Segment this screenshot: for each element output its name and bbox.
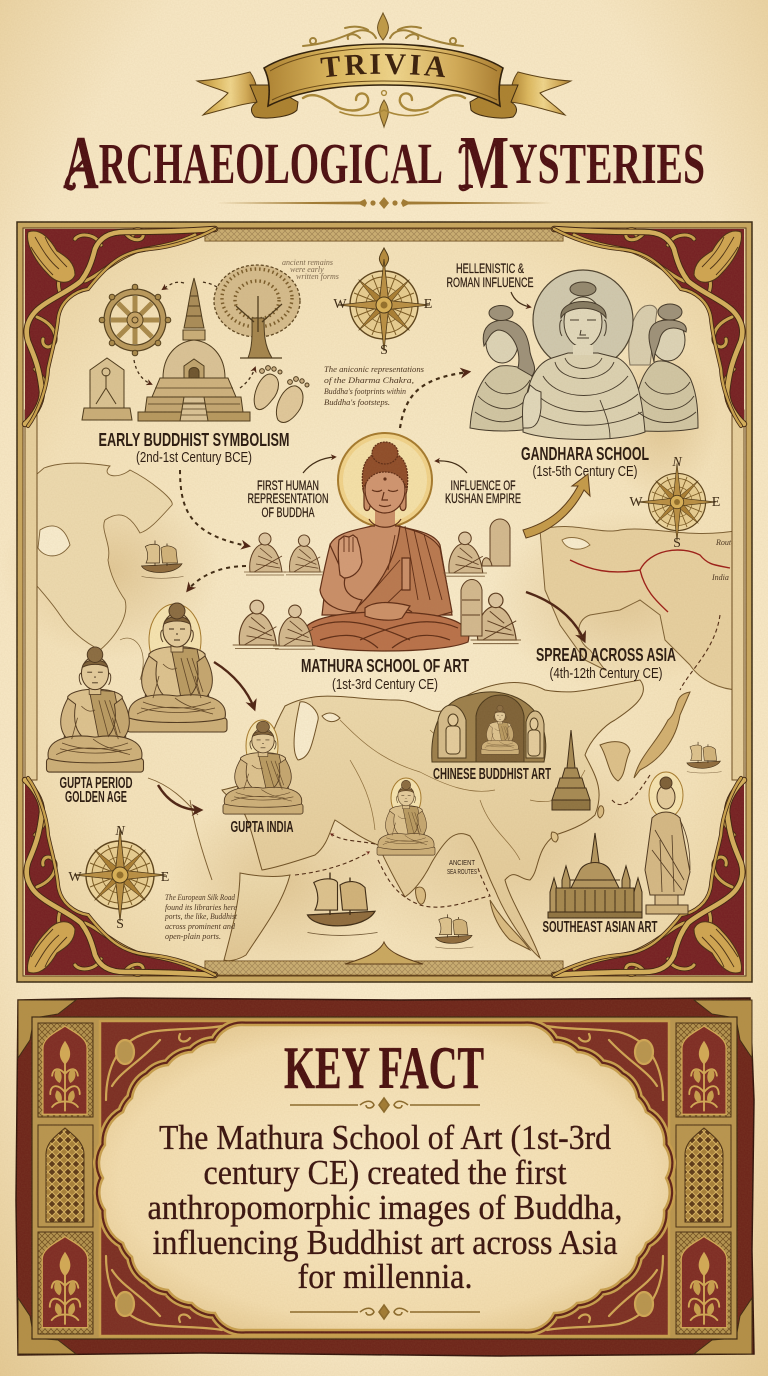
arrow: to Gandhara xyxy=(523,474,590,538)
icon: compass bottom left: E xyxy=(161,870,169,885)
map: west continent xyxy=(30,463,172,680)
label: sea routes xyxy=(447,860,477,876)
icon: small sailing ship xyxy=(435,914,473,948)
icon: temple xyxy=(548,833,642,918)
key fact body text: anthropomorphic images of Buddha, xyxy=(148,1188,622,1227)
label: first human representation: REPRESENTATION xyxy=(248,491,328,506)
sculptor figures xyxy=(233,519,521,649)
key fact body text: The Mathura School of Art (1st-3rd xyxy=(159,1118,611,1157)
note: bottom script: across prominent and xyxy=(165,922,236,931)
label: Hellenistic influence: ROMAN INFLUENCE xyxy=(446,275,534,290)
frame corners xyxy=(25,229,744,975)
corner scrollwork xyxy=(106,1026,663,1330)
label: Southeast Asian art: SOUTHEAST ASIAN ART xyxy=(542,919,658,936)
icon: compass bottom left: S xyxy=(116,917,124,932)
ornament: banner flourish above xyxy=(303,13,463,46)
text block: spread across Asia: (4th-12th Century CE) xyxy=(550,666,662,682)
icon: compass right xyxy=(629,455,720,551)
icon: compass bottom left xyxy=(68,824,171,932)
icon: dharma wheel xyxy=(99,284,171,356)
dashed arrow to Gandhara xyxy=(400,372,468,428)
icon: compass right: W xyxy=(629,495,643,510)
label: first human representation xyxy=(248,478,328,520)
India Buddha xyxy=(377,778,435,855)
label: Kushan empire: INFLUENCE OF xyxy=(450,478,516,493)
dashed arrow: symbolism to Mathura xyxy=(180,470,248,546)
icon: stupa xyxy=(138,278,250,421)
icon: bodhi tree xyxy=(214,265,300,358)
Gupta seated Buddha, front xyxy=(46,647,144,772)
label: Kushan empire xyxy=(445,478,521,506)
text block: early Buddhist symbolism: EARLY BUDDHIST SYMBOLISM xyxy=(98,429,290,450)
frame strip: left, right, top, bottom xyxy=(25,229,744,975)
title divider xyxy=(217,197,552,209)
key fact corner ornaments xyxy=(18,1000,752,1354)
map: Asia xyxy=(148,680,690,961)
title swashes xyxy=(66,146,472,190)
text block: early Buddhist symbolism: (2nd-1st Century BCE) xyxy=(136,450,252,466)
panel: history map xyxy=(0,222,752,982)
map parchment xyxy=(23,228,746,976)
label: first human representation: FIRST HUMAN xyxy=(257,478,319,493)
text block: Gandhara school: GANDHARA SCHOOL xyxy=(521,443,649,464)
map: silk road inset: India xyxy=(711,573,729,582)
icon: galleon xyxy=(308,872,378,935)
inner gold frame xyxy=(32,1017,737,1339)
note: symbolism script: of the Dharma Chakra, xyxy=(324,376,414,385)
note: top script: were early xyxy=(290,265,324,274)
trade routes xyxy=(295,615,720,907)
title xyxy=(63,121,705,205)
Gandhara statues xyxy=(470,270,698,440)
note: bottom script: ports, the like, Buddhist xyxy=(164,912,238,921)
arrow: first human xyxy=(303,457,335,473)
icon: sailing ship west xyxy=(142,540,184,578)
text block: spread across Asia: SPREAD ACROSS ASIA xyxy=(536,644,676,665)
arrow: Hellenistic xyxy=(511,292,530,307)
icon: compass north: W xyxy=(333,297,347,312)
map: silk road inset xyxy=(540,526,740,690)
note: bottom script: found its libraries here xyxy=(165,903,237,912)
icon: compass right: S xyxy=(673,536,681,551)
Gupta seated Buddha, raised hand xyxy=(127,603,227,732)
icon: footprints xyxy=(254,366,309,422)
map: silk road inset: Routes xyxy=(715,538,738,547)
icon: compass right: E xyxy=(712,495,720,510)
icon: compass bottom left: W xyxy=(68,870,82,885)
note: top script: ancient remains xyxy=(282,258,333,267)
symbolism arrows xyxy=(134,282,255,388)
label: Gupta golden age: GUPTA PERIOD xyxy=(60,775,132,792)
title: RCHAEOLOGICAL xyxy=(99,131,443,196)
icon: compass right: N xyxy=(671,455,682,470)
note: symbolism script: Buddha's footsteps. xyxy=(324,398,390,407)
parchment scalloped panel xyxy=(99,1025,670,1330)
dashed arrow: Mathura to Gupta xyxy=(188,566,246,590)
Mathura Buddha xyxy=(301,433,469,651)
label: sea routes: ANCIENT xyxy=(449,860,476,867)
arrow: upper Gupta xyxy=(214,662,254,708)
key fact divider bottom xyxy=(290,1305,480,1319)
key fact body text: for millennia. xyxy=(298,1257,472,1296)
key fact heading: KEY FACT xyxy=(284,1035,484,1101)
arrow: Kushan xyxy=(436,461,467,473)
text block: Mathura school: MATHURA SCHOOL OF ART xyxy=(301,655,469,676)
arrow: spread across Asia xyxy=(526,592,584,640)
label: Kushan empire: KUSHAN EMPIRE xyxy=(445,491,521,506)
label: first human representation: OF BUDDHA xyxy=(262,505,314,520)
icon: Chinese cave xyxy=(432,692,546,762)
Gupta India Buddha xyxy=(223,720,303,814)
icon: compass north xyxy=(333,248,435,358)
key fact body text xyxy=(148,1118,622,1296)
map frame xyxy=(17,222,752,982)
key fact body text: influencing Buddhist art across Asia xyxy=(152,1223,618,1262)
centre red ground xyxy=(100,1021,669,1336)
label: Chinese Buddhist art: CHINESE BUDDHIST ART xyxy=(433,766,551,783)
label: Gupta golden age: GOLDEN AGE xyxy=(65,789,127,806)
label: Gupta India: GUPTA INDIA xyxy=(230,819,294,836)
note: bottom script: The European Silk Road xyxy=(165,893,236,902)
note: top script: written forms xyxy=(296,272,339,281)
banner title text: TRIVIA xyxy=(320,54,445,78)
text block: early Buddhist symbolism xyxy=(98,429,290,466)
bottom frame ornament xyxy=(345,942,423,964)
arrow: golden age xyxy=(158,785,200,810)
text block: Mathura school: (1st-3rd Century CE) xyxy=(332,677,438,693)
key fact divider top xyxy=(290,1098,480,1112)
title: A xyxy=(63,121,99,205)
icon: compass north: E xyxy=(424,297,432,312)
left column panels xyxy=(38,1023,93,1334)
label: Hellenistic influence xyxy=(446,261,534,290)
title: M xyxy=(460,121,509,205)
banner: Trivia ribbon xyxy=(195,43,573,119)
standing Buddha xyxy=(645,772,690,914)
icon: pagoda xyxy=(552,730,590,810)
text block: Gandhara school: (1st-5th Century CE) xyxy=(532,464,638,480)
note: bottom script xyxy=(164,893,238,941)
key fact outer frame xyxy=(16,998,754,1356)
note: symbolism script: Buddha's footprints within xyxy=(324,387,406,396)
label: Hellenistic influence: HELLENISTIC & xyxy=(456,261,524,276)
ornament: banner flourish below xyxy=(303,91,465,127)
icon: eastern ship xyxy=(687,742,722,773)
right column panels xyxy=(676,1023,731,1334)
note: bottom script: open-plain ports. xyxy=(165,932,221,941)
note: top script xyxy=(282,258,339,281)
text block: Mathura school xyxy=(301,655,469,693)
key fact body text: century CE) created the first xyxy=(204,1153,567,1192)
label: sea routes: SEA ROUTES xyxy=(447,869,477,876)
text block: spread across Asia xyxy=(536,644,676,682)
panel: key fact xyxy=(16,998,754,1356)
text block: Gandhara school xyxy=(521,443,649,480)
note: symbolism script xyxy=(324,365,424,407)
icon: compass bottom left: N xyxy=(114,824,125,839)
note: symbolism script: The aniconic representations xyxy=(324,365,424,374)
label: Gupta golden age xyxy=(60,775,132,806)
icon: carved stele xyxy=(82,358,132,420)
icon: compass north: S xyxy=(380,343,388,358)
